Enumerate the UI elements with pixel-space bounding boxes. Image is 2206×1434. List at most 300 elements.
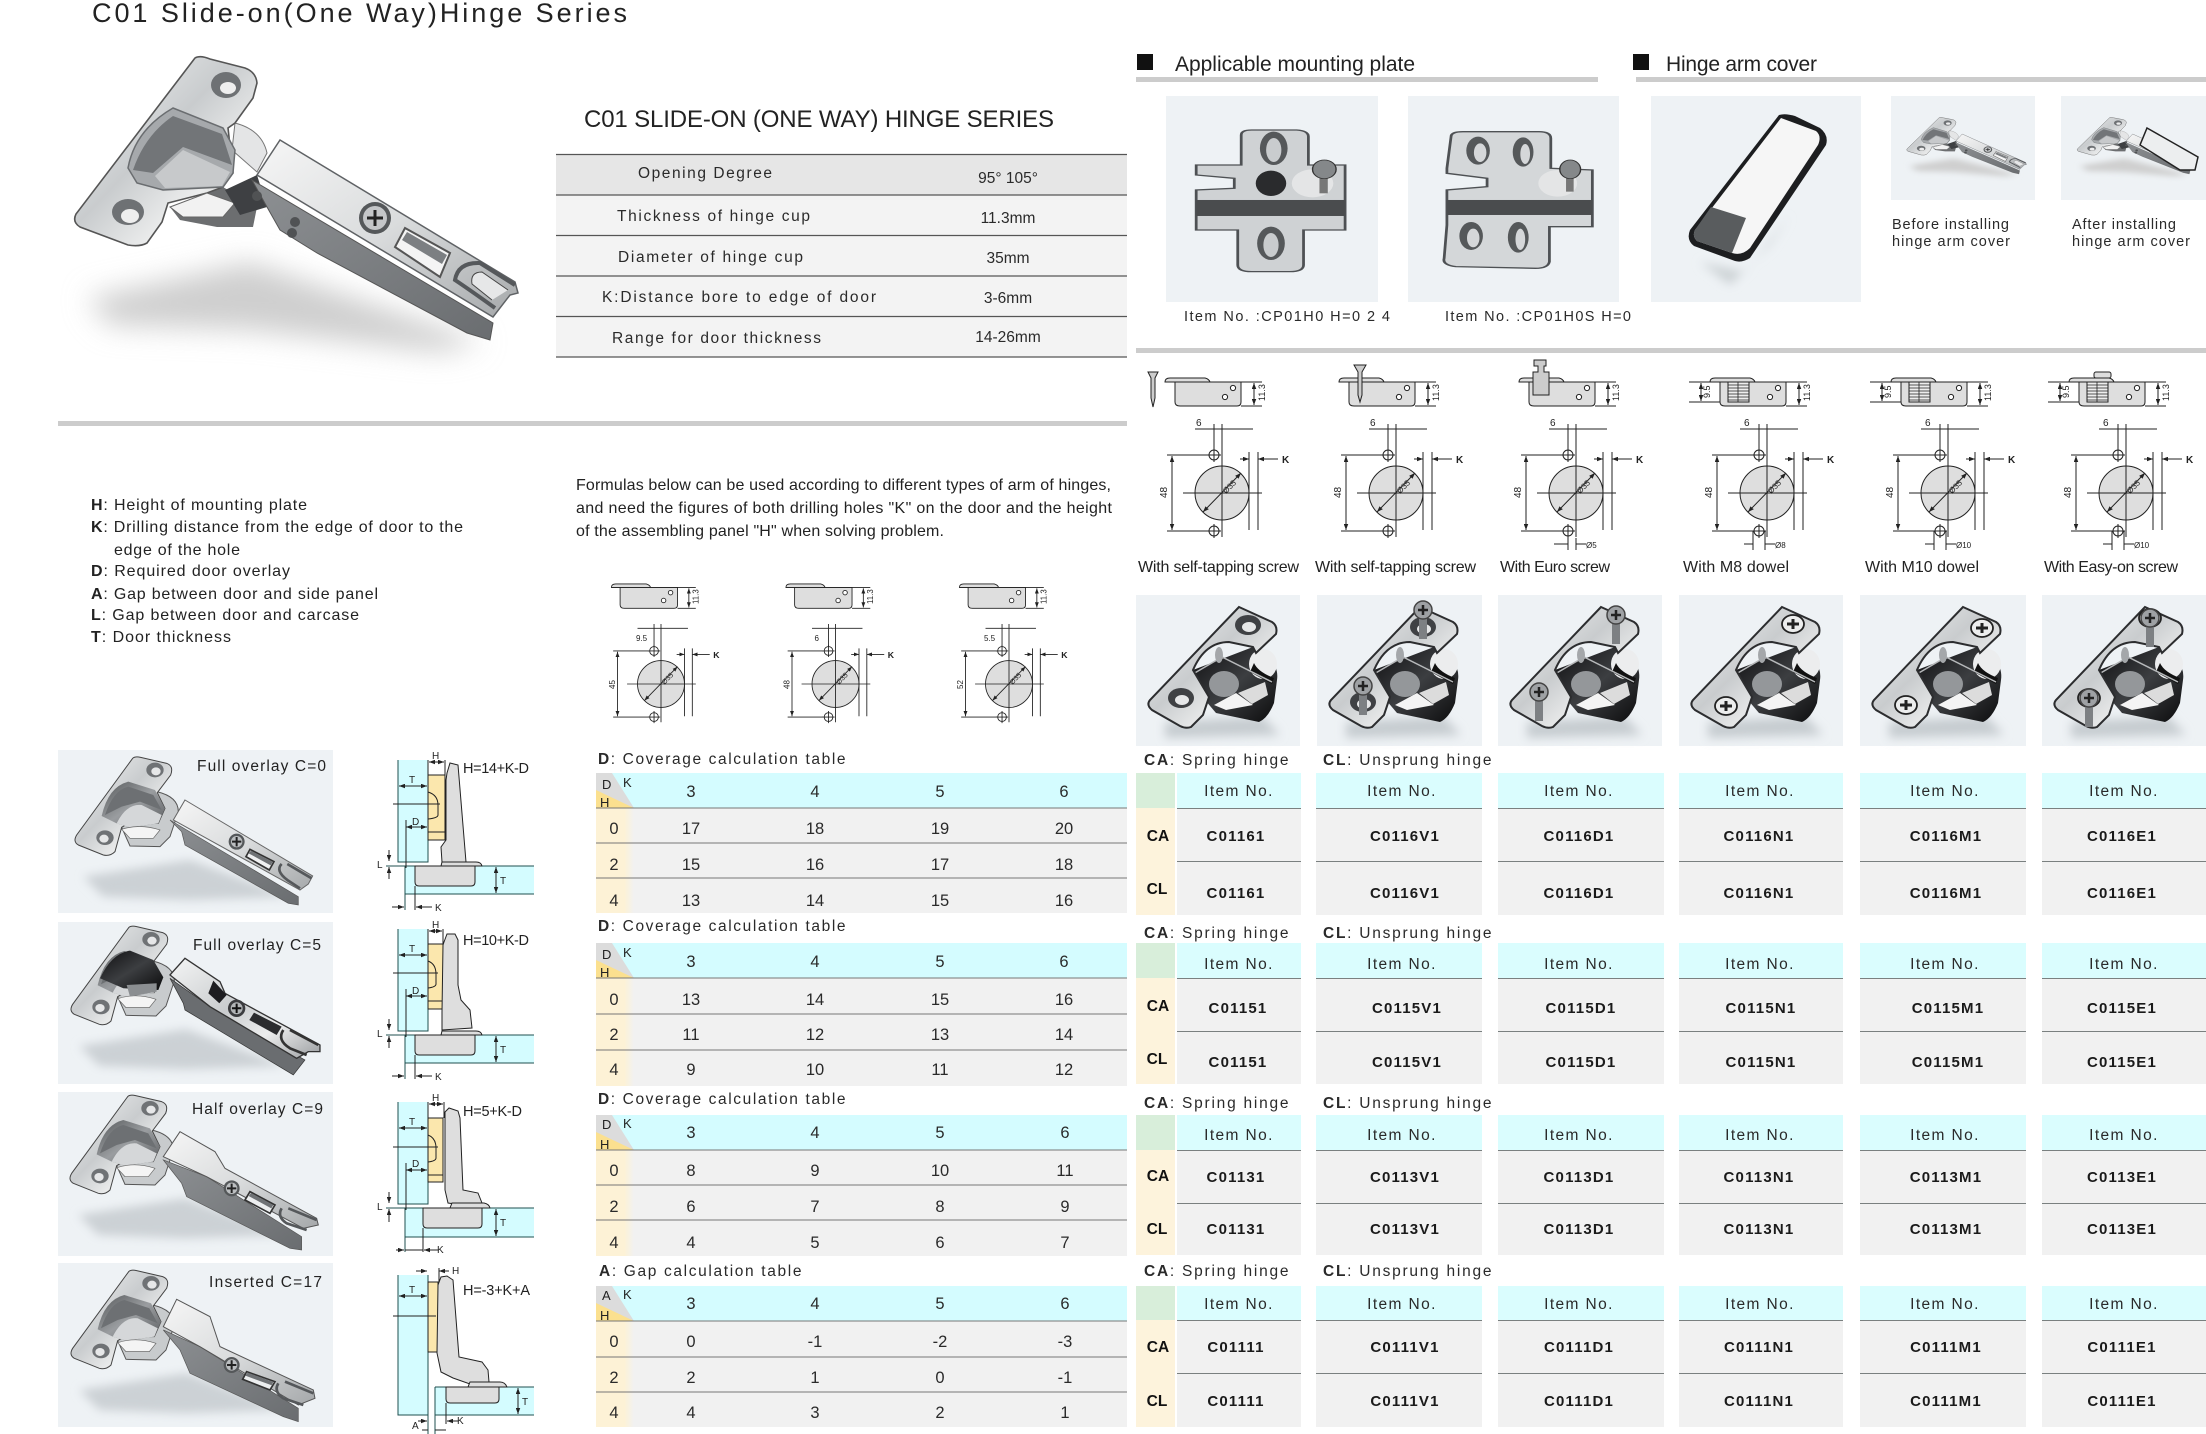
photo: cup Euro screws xyxy=(1510,606,1642,738)
table: coverage calculation C=9: 8 xyxy=(686,1162,696,1180)
table: coverage calculation C=0: 3 xyxy=(686,783,696,801)
table: item numbers C=0: C0116N1 xyxy=(1724,885,1794,902)
panel: half overlay C=9 photo xyxy=(58,1092,333,1256)
table: item numbers C=9: Item No. xyxy=(1910,1127,1980,1144)
table: item numbers C=5: C0115E1 xyxy=(2087,1054,2157,1071)
column captions: With Euro screw xyxy=(1500,559,1610,576)
technical drawing: Euro screw: 48 xyxy=(1513,486,1524,498)
table: item numbers C=5: Item No. xyxy=(1910,956,1980,973)
table: item numbers C=0: C01161 xyxy=(1207,885,1265,902)
caption: CP01H0S: Item No. :CP01H0S H=0 xyxy=(1445,309,1631,325)
table: item numbers C=5: Item No. xyxy=(1367,956,1437,973)
formula note: Formulas below can be used according to different types of arm of hinges, xyxy=(576,477,1111,494)
drilling diagram: 52: 52 xyxy=(956,680,965,689)
table: gap calculation: 4 xyxy=(810,1295,820,1313)
table: coverage calculation C=0: 19 xyxy=(931,820,949,838)
legend line: CA: Spring hinge xyxy=(1144,752,1290,769)
formula: H=-3+K+A xyxy=(463,1283,530,1299)
table: coverage calculation C=5: 2 xyxy=(609,1026,619,1044)
table: item numbers C=9: C0113M1 xyxy=(1910,1169,1982,1186)
table: item numbers C=0 xyxy=(1136,752,2206,915)
table: coverage calculation C=9: 9 xyxy=(1060,1198,1070,1216)
section diagram: inserted C=17: K xyxy=(457,1416,464,1427)
table: coverage calculation C=5: 9 xyxy=(686,1061,696,1079)
table: item numbers C=9: CA xyxy=(1147,1168,1169,1185)
label: Inserted C=17 xyxy=(209,1274,322,1291)
drilling diagram: 45: 9.5 xyxy=(636,634,648,643)
section diagram: half overlay C=9: H xyxy=(432,1093,439,1104)
table: coverage calculation C=5 xyxy=(596,918,1127,1086)
table: coverage calculation C=5: 12 xyxy=(806,1026,824,1044)
table: item numbers C=17: C01111 xyxy=(1207,1393,1265,1410)
panel: hinge specification table: Thickness of hinge cup xyxy=(617,208,810,225)
photo: mounting plate CP01H0S xyxy=(1444,132,1592,268)
formula note: and need the figures of both drilling holes "K" on the door and the height xyxy=(576,500,1113,517)
table: item numbers C=0: CL xyxy=(1147,881,1167,898)
table: coverage calculation C=9: H xyxy=(600,1137,609,1152)
table: item numbers C=0: Item No. xyxy=(1544,783,1614,800)
table: coverage calculation C=9 xyxy=(596,1091,1127,1256)
table: item numbers C=5: Item No. xyxy=(2089,956,2159,973)
photo: mounting plate CP01H0 xyxy=(1196,130,1345,272)
table: item numbers C=5: Item No. xyxy=(1204,956,1274,973)
section diagram: full overlay C=0: T xyxy=(409,775,415,786)
table: item numbers C=9: C01131 xyxy=(1207,1169,1265,1186)
table: gap calculation xyxy=(596,1263,1127,1427)
label: Full overlay C=0 xyxy=(197,758,326,775)
table: item numbers C=0: C0116V1 xyxy=(1370,885,1440,902)
table: item numbers C=9: C0113V1 xyxy=(1370,1221,1440,1238)
table: coverage calculation C=0: 15 xyxy=(682,856,700,874)
table title: D: Coverage calculation table xyxy=(598,1091,847,1108)
table: item numbers C=5: C0115M1 xyxy=(1912,1054,1984,1071)
table: gap calculation: -3 xyxy=(1058,1333,1072,1351)
table: item numbers C=9: C0113N1 xyxy=(1724,1169,1794,1186)
table: coverage calculation C=5: 4 xyxy=(609,1061,619,1079)
section diagram: inserted C=17: H xyxy=(452,1266,459,1277)
table: item numbers C=5: C0115V1 xyxy=(1372,1000,1442,1017)
technical drawing: self-tapping screw 2: 6 xyxy=(1370,418,1376,429)
legend: dimension key: L: Gap between door and carcase xyxy=(91,607,359,624)
legend line: CA: Spring hinge xyxy=(1144,925,1290,942)
column captions: With self-tapping screw xyxy=(1138,559,1299,576)
table: coverage calculation C=5: H xyxy=(600,965,609,980)
table: coverage calculation C=0: 13 xyxy=(682,892,700,910)
table: item numbers C=17: C0111N1 xyxy=(1724,1393,1794,1410)
table: item numbers C=0: Item No. xyxy=(1910,783,1980,800)
table: item numbers C=5: C0115D1 xyxy=(1546,1054,1616,1071)
table: item numbers C=5: C0115V1 xyxy=(1372,1054,1442,1071)
section diagram: inserted C=17 xyxy=(393,1266,534,1434)
table: coverage calculation C=9: 2 xyxy=(609,1198,619,1216)
table: item numbers C=5: C0115N1 xyxy=(1726,1000,1796,1017)
technical drawing: M8 dowel xyxy=(1689,378,1835,550)
table: coverage calculation C=0: 14 xyxy=(806,892,824,910)
technical drawing: M10 dowel xyxy=(1870,378,2016,550)
technical drawing: self-tapping screw 2: 48 xyxy=(1333,486,1344,498)
table: gap calculation: -2 xyxy=(933,1333,947,1351)
table: gap calculation: 1 xyxy=(810,1369,820,1387)
table: item numbers C=0: C0116N1 xyxy=(1724,828,1794,845)
table: gap calculation: 1 xyxy=(1060,1404,1070,1422)
panel: hinge specification table: Diameter of hinge cup xyxy=(618,249,803,266)
table: gap calculation: 2 xyxy=(609,1369,619,1387)
table: item numbers C=9: C0113E1 xyxy=(2087,1221,2157,1238)
table: item numbers C=9: Item No. xyxy=(1204,1127,1274,1144)
photo: cup M8 dowels xyxy=(1691,607,1823,738)
table title: D: Coverage calculation table xyxy=(598,751,847,768)
section diagram: full overlay C=0: K xyxy=(435,903,442,914)
caption: CP01H0: Item No. :CP01H0 H=0 2 4 xyxy=(1184,309,1390,325)
section diagram: half overlay C=9: T xyxy=(409,1117,415,1128)
table: item numbers C=0: C01161 xyxy=(1207,828,1265,845)
table: coverage calculation C=0: 4 xyxy=(810,783,820,801)
table: coverage calculation C=0: 17 xyxy=(931,856,949,874)
panel: hinge specification table: Opening Degree xyxy=(638,165,772,182)
section diagram: half overlay C=9: K xyxy=(437,1245,444,1256)
technical drawing: self-tapping screw 1: 48 xyxy=(1159,486,1170,498)
section diagram: inserted C=17: T xyxy=(409,1285,415,1296)
table: item numbers C=5: C0115M1 xyxy=(1912,1000,1984,1017)
table: item numbers C=17: C0111E1 xyxy=(2087,1393,2157,1410)
table: coverage calculation C=9: 6 xyxy=(686,1198,696,1216)
table: gap calculation: 0 xyxy=(609,1333,619,1351)
formula note xyxy=(576,477,1113,540)
table: coverage calculation C=0: 16 xyxy=(806,856,824,874)
table: item numbers C=5: C0115E1 xyxy=(2087,1000,2157,1017)
table: gap calculation: 2 xyxy=(935,1404,945,1422)
table heading: C01 SLIDE-ON (ONE WAY) HINGE SERIES xyxy=(584,106,1054,133)
table: item numbers C=17: Item No. xyxy=(1204,1296,1274,1313)
panel: hinge arm cover xyxy=(1633,53,2206,302)
table: gap calculation: 2 xyxy=(686,1369,696,1387)
table: item numbers C=0: Item No. xyxy=(1725,783,1795,800)
table: coverage calculation C=9: 0 xyxy=(609,1162,619,1180)
table: coverage calculation C=9: K xyxy=(623,1116,632,1131)
table: coverage calculation C=0: 0 xyxy=(609,820,619,838)
column captions: With M10 dowel xyxy=(1865,559,1979,576)
photo: cup self-tapping holes xyxy=(1148,607,1280,738)
table: coverage calculation C=9: 5 xyxy=(935,1124,945,1142)
table: coverage calculation C=0: 6 xyxy=(1059,783,1069,801)
table title: D: Coverage calculation table xyxy=(598,918,847,935)
table: item numbers C=5: CL xyxy=(1147,1051,1167,1068)
table: coverage calculation C=5: 13 xyxy=(931,1026,949,1044)
table: gap calculation: 0 xyxy=(935,1369,945,1387)
panel: hinge specification table: K:Distance bore to edge of door xyxy=(602,289,876,306)
table: coverage calculation C=9: 7 xyxy=(1060,1234,1070,1252)
legend: dimension key: K: Drilling distance from the edge of door to the xyxy=(91,519,463,536)
table: coverage calculation C=0: H xyxy=(600,795,609,810)
label: Full overlay C=5 xyxy=(193,937,321,954)
drilling diagram: 48: 6 xyxy=(814,634,820,643)
technical drawing: M8 dowel: Ø8 xyxy=(1775,541,1786,550)
table: coverage calculation C=5: 16 xyxy=(1055,991,1073,1009)
table: item numbers C=5: Item No. xyxy=(1544,956,1614,973)
table: coverage calculation C=5: 14 xyxy=(1055,1026,1073,1044)
table: coverage calculation C=5: 14 xyxy=(806,991,824,1009)
section diagram: full overlay C=0 xyxy=(377,751,534,914)
legend: dimension key: edge of the hole xyxy=(114,542,240,559)
legend: dimension key: H: Height of mounting plate xyxy=(91,497,307,514)
table: item numbers C=5: CA xyxy=(1147,998,1169,1015)
panel: full overlay C=5 photo xyxy=(58,922,333,1084)
table: coverage calculation C=5: K xyxy=(623,945,632,960)
table title: A: Gap calculation table xyxy=(599,1263,803,1280)
section diagram: half overlay C=9: L xyxy=(377,1202,383,1213)
table: item numbers C=5: CL: Unsprung hinge xyxy=(1323,925,1493,942)
column captions: With Easy-on screw xyxy=(2044,559,2178,576)
column captions xyxy=(1138,559,2178,576)
table: coverage calculation C=0: 17 xyxy=(682,820,700,838)
table: item numbers C=17: C0111V1 xyxy=(1370,1339,1440,1356)
table: item numbers C=17: CL: Unsprung hinge xyxy=(1323,1263,1493,1280)
table: item numbers C=9: C0113N1 xyxy=(1724,1221,1794,1238)
table: item numbers C=17: Item No. xyxy=(1725,1296,1795,1313)
table: item numbers C=9: CL: Unsprung hinge xyxy=(1323,1095,1493,1112)
table: coverage calculation C=0: 18 xyxy=(806,820,824,838)
table: coverage calculation C=9: 3 xyxy=(686,1124,696,1142)
table: gap calculation: 6 xyxy=(1060,1295,1070,1313)
table: coverage calculation C=5: 4 xyxy=(810,953,820,971)
heading: hinge arm cover: Hinge arm cover xyxy=(1666,53,1817,76)
formula: H=5+K-D xyxy=(463,1104,522,1120)
table: item numbers C=17: C0111M1 xyxy=(1910,1393,1982,1410)
table: coverage calculation C=9: 8 xyxy=(935,1198,945,1216)
table: coverage calculation C=9: D xyxy=(602,1117,611,1132)
photo: cup M10 dowels xyxy=(1872,607,2004,738)
table: item numbers C=0: CL: Unsprung hinge xyxy=(1323,752,1493,769)
table: coverage calculation C=9: 6 xyxy=(935,1234,945,1252)
heading: mounting plate: Applicable mounting plate xyxy=(1175,53,1415,76)
table: coverage calculation C=0: 16 xyxy=(1055,892,1073,910)
section diagram: full overlay C=5: T xyxy=(409,944,415,955)
formula: H=10+K-D xyxy=(463,933,529,949)
table: gap calculation: -1 xyxy=(1058,1369,1072,1387)
technical drawing: Easy-on screw xyxy=(2048,372,2194,550)
table: coverage calculation C=0: K xyxy=(623,775,632,790)
panel: applicable mounting plate xyxy=(1136,53,1631,325)
table: item numbers C=9: Item No. xyxy=(1367,1127,1437,1144)
table: item numbers C=17 xyxy=(1136,1263,2206,1427)
table: coverage calculation C=5: 13 xyxy=(682,991,700,1009)
table: item numbers C=17: Item No. xyxy=(1367,1296,1437,1313)
section diagram: full overlay C=5: L xyxy=(377,1029,383,1040)
table: item numbers C=0: C0116E1 xyxy=(2087,885,2157,902)
panel: hinge specification table: Range for door thickness xyxy=(612,330,821,347)
panel: hinge specification table: 35mm xyxy=(986,250,1030,267)
legend: dimension key xyxy=(91,497,463,646)
table: gap calculation: 3 xyxy=(686,1295,696,1313)
table: coverage calculation C=0: 20 xyxy=(1055,820,1073,838)
table: item numbers C=9: C0113V1 xyxy=(1370,1169,1440,1186)
section diagram: full overlay C=5: D xyxy=(412,986,419,997)
table: coverage calculation C=5: 5 xyxy=(935,953,945,971)
section diagram: full overlay C=0: D xyxy=(412,817,419,828)
table: gap calculation: 0 xyxy=(686,1333,696,1351)
table: gap calculation: K xyxy=(623,1287,632,1302)
table: item numbers C=0: C0116E1 xyxy=(2087,828,2157,845)
label: Half overlay C=9 xyxy=(192,1101,323,1118)
table: coverage calculation C=0 xyxy=(596,751,1127,913)
table: item numbers C=17: C0111M1 xyxy=(1910,1339,1982,1356)
table: gap calculation: 4 xyxy=(686,1404,696,1422)
technical drawing: Euro screw: 6 xyxy=(1550,418,1556,429)
section diagram: full overlay C=5: T xyxy=(500,1045,506,1056)
table: coverage calculation C=0: D xyxy=(602,777,611,792)
table: coverage calculation C=5: 11 xyxy=(682,1026,700,1044)
formula: H=14+K-D xyxy=(463,761,529,777)
table: item numbers C=5: C0115N1 xyxy=(1726,1054,1796,1071)
panel: inserted C=17 photo xyxy=(58,1263,333,1427)
table: item numbers C=9: C0113M1 xyxy=(1910,1221,1982,1238)
table: gap calculation: 5 xyxy=(935,1295,945,1313)
table: coverage calculation C=9: 4 xyxy=(810,1124,820,1142)
panel: full overlay C=0 photo xyxy=(58,750,333,913)
technical drawing: self-tapping screw 2 xyxy=(1333,365,1464,538)
panel: hinge specification table: 14-26mm xyxy=(975,329,1041,346)
table: coverage calculation C=5: 12 xyxy=(1055,1061,1073,1079)
table: coverage calculation C=9: 4 xyxy=(686,1234,696,1252)
table: item numbers C=17: C0111D1 xyxy=(1544,1339,1614,1356)
table: item numbers C=17: Item No. xyxy=(1544,1296,1614,1313)
drilling diagram: 52 xyxy=(956,584,1068,723)
panel: hinge specification table: 95° 105° xyxy=(978,170,1038,187)
table: coverage calculation C=9: 7 xyxy=(810,1198,820,1216)
table: item numbers C=17: C0111N1 xyxy=(1724,1339,1794,1356)
table: item numbers C=17: C0111D1 xyxy=(1544,1393,1614,1410)
table: coverage calculation C=9: 4 xyxy=(609,1234,619,1252)
table: item numbers C=17: CL xyxy=(1147,1393,1167,1410)
drilling diagram: 48 xyxy=(782,584,895,723)
technical drawing: Euro screw xyxy=(1513,360,1644,550)
drilling diagram: 52: 5.5 xyxy=(984,634,996,643)
legend line: CA: Spring hinge xyxy=(1144,1263,1290,1280)
legend: dimension key: A: Gap between door and side panel xyxy=(91,586,378,603)
panel: hinge specification table: 11.3mm xyxy=(981,210,1035,227)
table: item numbers C=17: C0111V1 xyxy=(1370,1393,1440,1410)
section diagram: inserted C=17: A xyxy=(412,1421,419,1432)
technical drawing: self-tapping screw 1 xyxy=(1148,372,1290,538)
table: item numbers C=5 xyxy=(1136,925,2206,1084)
table: item numbers C=0: CA xyxy=(1147,828,1169,845)
table: gap calculation: -1 xyxy=(808,1333,822,1351)
table: item numbers C=9: C0113D1 xyxy=(1544,1221,1614,1238)
table: coverage calculation C=9: 5 xyxy=(810,1234,820,1252)
legend line: CA: Spring hinge xyxy=(1144,1095,1290,1112)
table: item numbers C=0: Item No. xyxy=(2089,783,2159,800)
column captions: With self-tapping screw xyxy=(1315,559,1476,576)
table: item numbers C=9: Item No. xyxy=(1725,1127,1795,1144)
table: coverage calculation C=0: 4 xyxy=(609,892,619,910)
table: item numbers C=17: CA xyxy=(1147,1339,1169,1356)
section diagram: inserted C=17: T xyxy=(522,1397,528,1408)
table: coverage calculation C=5: 6 xyxy=(1059,953,1069,971)
table: gap calculation: A xyxy=(602,1288,611,1303)
section diagram: full overlay C=5 xyxy=(377,920,534,1083)
drilling diagram: 48: 48 xyxy=(782,680,792,689)
table: item numbers C=9: CL xyxy=(1147,1221,1167,1238)
table: item numbers C=9: C0113D1 xyxy=(1544,1169,1614,1186)
table: item numbers C=17: Item No. xyxy=(1910,1296,1980,1313)
section diagram: full overlay C=0: L xyxy=(377,860,383,871)
table: item numbers C=0: C0116V1 xyxy=(1370,828,1440,845)
technical drawing: M10 dowel: Ø10 xyxy=(1956,541,1972,550)
caption: after installing: After installing xyxy=(2072,217,2176,233)
table: coverage calculation C=5: 3 xyxy=(686,953,696,971)
caption: after installing: hinge arm cover xyxy=(2072,234,2190,250)
table: coverage calculation C=0: 2 xyxy=(609,856,619,874)
photo: cup self-tapping screws xyxy=(1329,601,1461,738)
legend: dimension key: D: Required door overlay xyxy=(91,563,290,580)
table: coverage calculation C=9: 11 xyxy=(1056,1162,1074,1180)
table: item numbers C=0: C0116M1 xyxy=(1910,828,1982,845)
section diagram: full overlay C=5: K xyxy=(435,1072,442,1083)
table: item numbers C=5: C01151 xyxy=(1209,1054,1267,1071)
table: coverage calculation C=9: 10 xyxy=(931,1162,949,1180)
photo row: hinge cups xyxy=(1136,595,2206,746)
product photo: main hinge xyxy=(75,57,518,352)
table: item numbers C=9: C0113E1 xyxy=(2087,1169,2157,1186)
table: item numbers C=9: Item No. xyxy=(2089,1127,2159,1144)
technical drawing: Easy-on screw: Ø10 xyxy=(2134,541,2150,550)
section diagram: full overlay C=0: H xyxy=(432,751,439,762)
table: gap calculation: 3 xyxy=(810,1404,820,1422)
panel: hinge specification table xyxy=(556,106,1127,357)
table: item numbers C=0: Item No. xyxy=(1367,783,1437,800)
table: coverage calculation C=5: 0 xyxy=(609,991,619,1009)
table: item numbers C=17: C01111 xyxy=(1207,1339,1265,1356)
section diagram: full overlay C=0: T xyxy=(500,876,506,887)
section diagram: half overlay C=9: T xyxy=(500,1218,506,1229)
table: item numbers C=9 xyxy=(1136,1095,2206,1255)
photo: hinge before cover xyxy=(1907,117,2026,176)
table: item numbers C=0: C0116D1 xyxy=(1544,828,1614,845)
table: item numbers C=5: C01151 xyxy=(1209,1000,1267,1017)
table: gap calculation: H xyxy=(600,1308,609,1323)
table: coverage calculation C=5: 10 xyxy=(806,1061,824,1079)
caption: before installing: Before installing xyxy=(1892,217,2009,233)
technical drawing: self-tapping screw 1: 6 xyxy=(1196,418,1202,429)
table: coverage calculation C=5: D xyxy=(602,947,611,962)
drilling diagram: 45 xyxy=(608,584,720,723)
table: coverage calculation C=5: 11 xyxy=(931,1061,949,1079)
table: item numbers C=0: Item No. xyxy=(1204,783,1274,800)
table: coverage calculation C=0: 15 xyxy=(931,892,949,910)
table: item numbers C=9: C01131 xyxy=(1207,1221,1265,1238)
table: item numbers C=0: C0116M1 xyxy=(1910,885,1982,902)
table: item numbers C=17: Item No. xyxy=(2089,1296,2159,1313)
table: item numbers C=9: Item No. xyxy=(1544,1127,1614,1144)
section diagram: half overlay C=9 xyxy=(377,1093,534,1256)
photo: hinge after cover xyxy=(2077,117,2198,176)
section diagram: half overlay C=9: D xyxy=(412,1159,419,1170)
column captions: With M8 dowel xyxy=(1683,559,1789,576)
table: gap calculation: 4 xyxy=(609,1404,619,1422)
table: item numbers C=17: C0111E1 xyxy=(2087,1339,2157,1356)
drilling diagram: 45: 45 xyxy=(608,680,617,689)
table: item numbers C=0: C0116D1 xyxy=(1544,885,1614,902)
table: coverage calculation C=0: 18 xyxy=(1055,856,1073,874)
table: coverage calculation C=5: 15 xyxy=(931,991,949,1009)
formula note: of the assembling panel "H" when solving problem. xyxy=(576,523,944,540)
caption: before installing: hinge arm cover xyxy=(1892,234,2010,250)
table: item numbers C=5: C0115D1 xyxy=(1546,1000,1616,1017)
legend: dimension key: T: Door thickness xyxy=(91,629,231,646)
table: coverage calculation C=9: 6 xyxy=(1060,1124,1070,1142)
section diagram: full overlay C=5: H xyxy=(432,920,439,931)
table: coverage calculation C=9: 9 xyxy=(810,1162,820,1180)
